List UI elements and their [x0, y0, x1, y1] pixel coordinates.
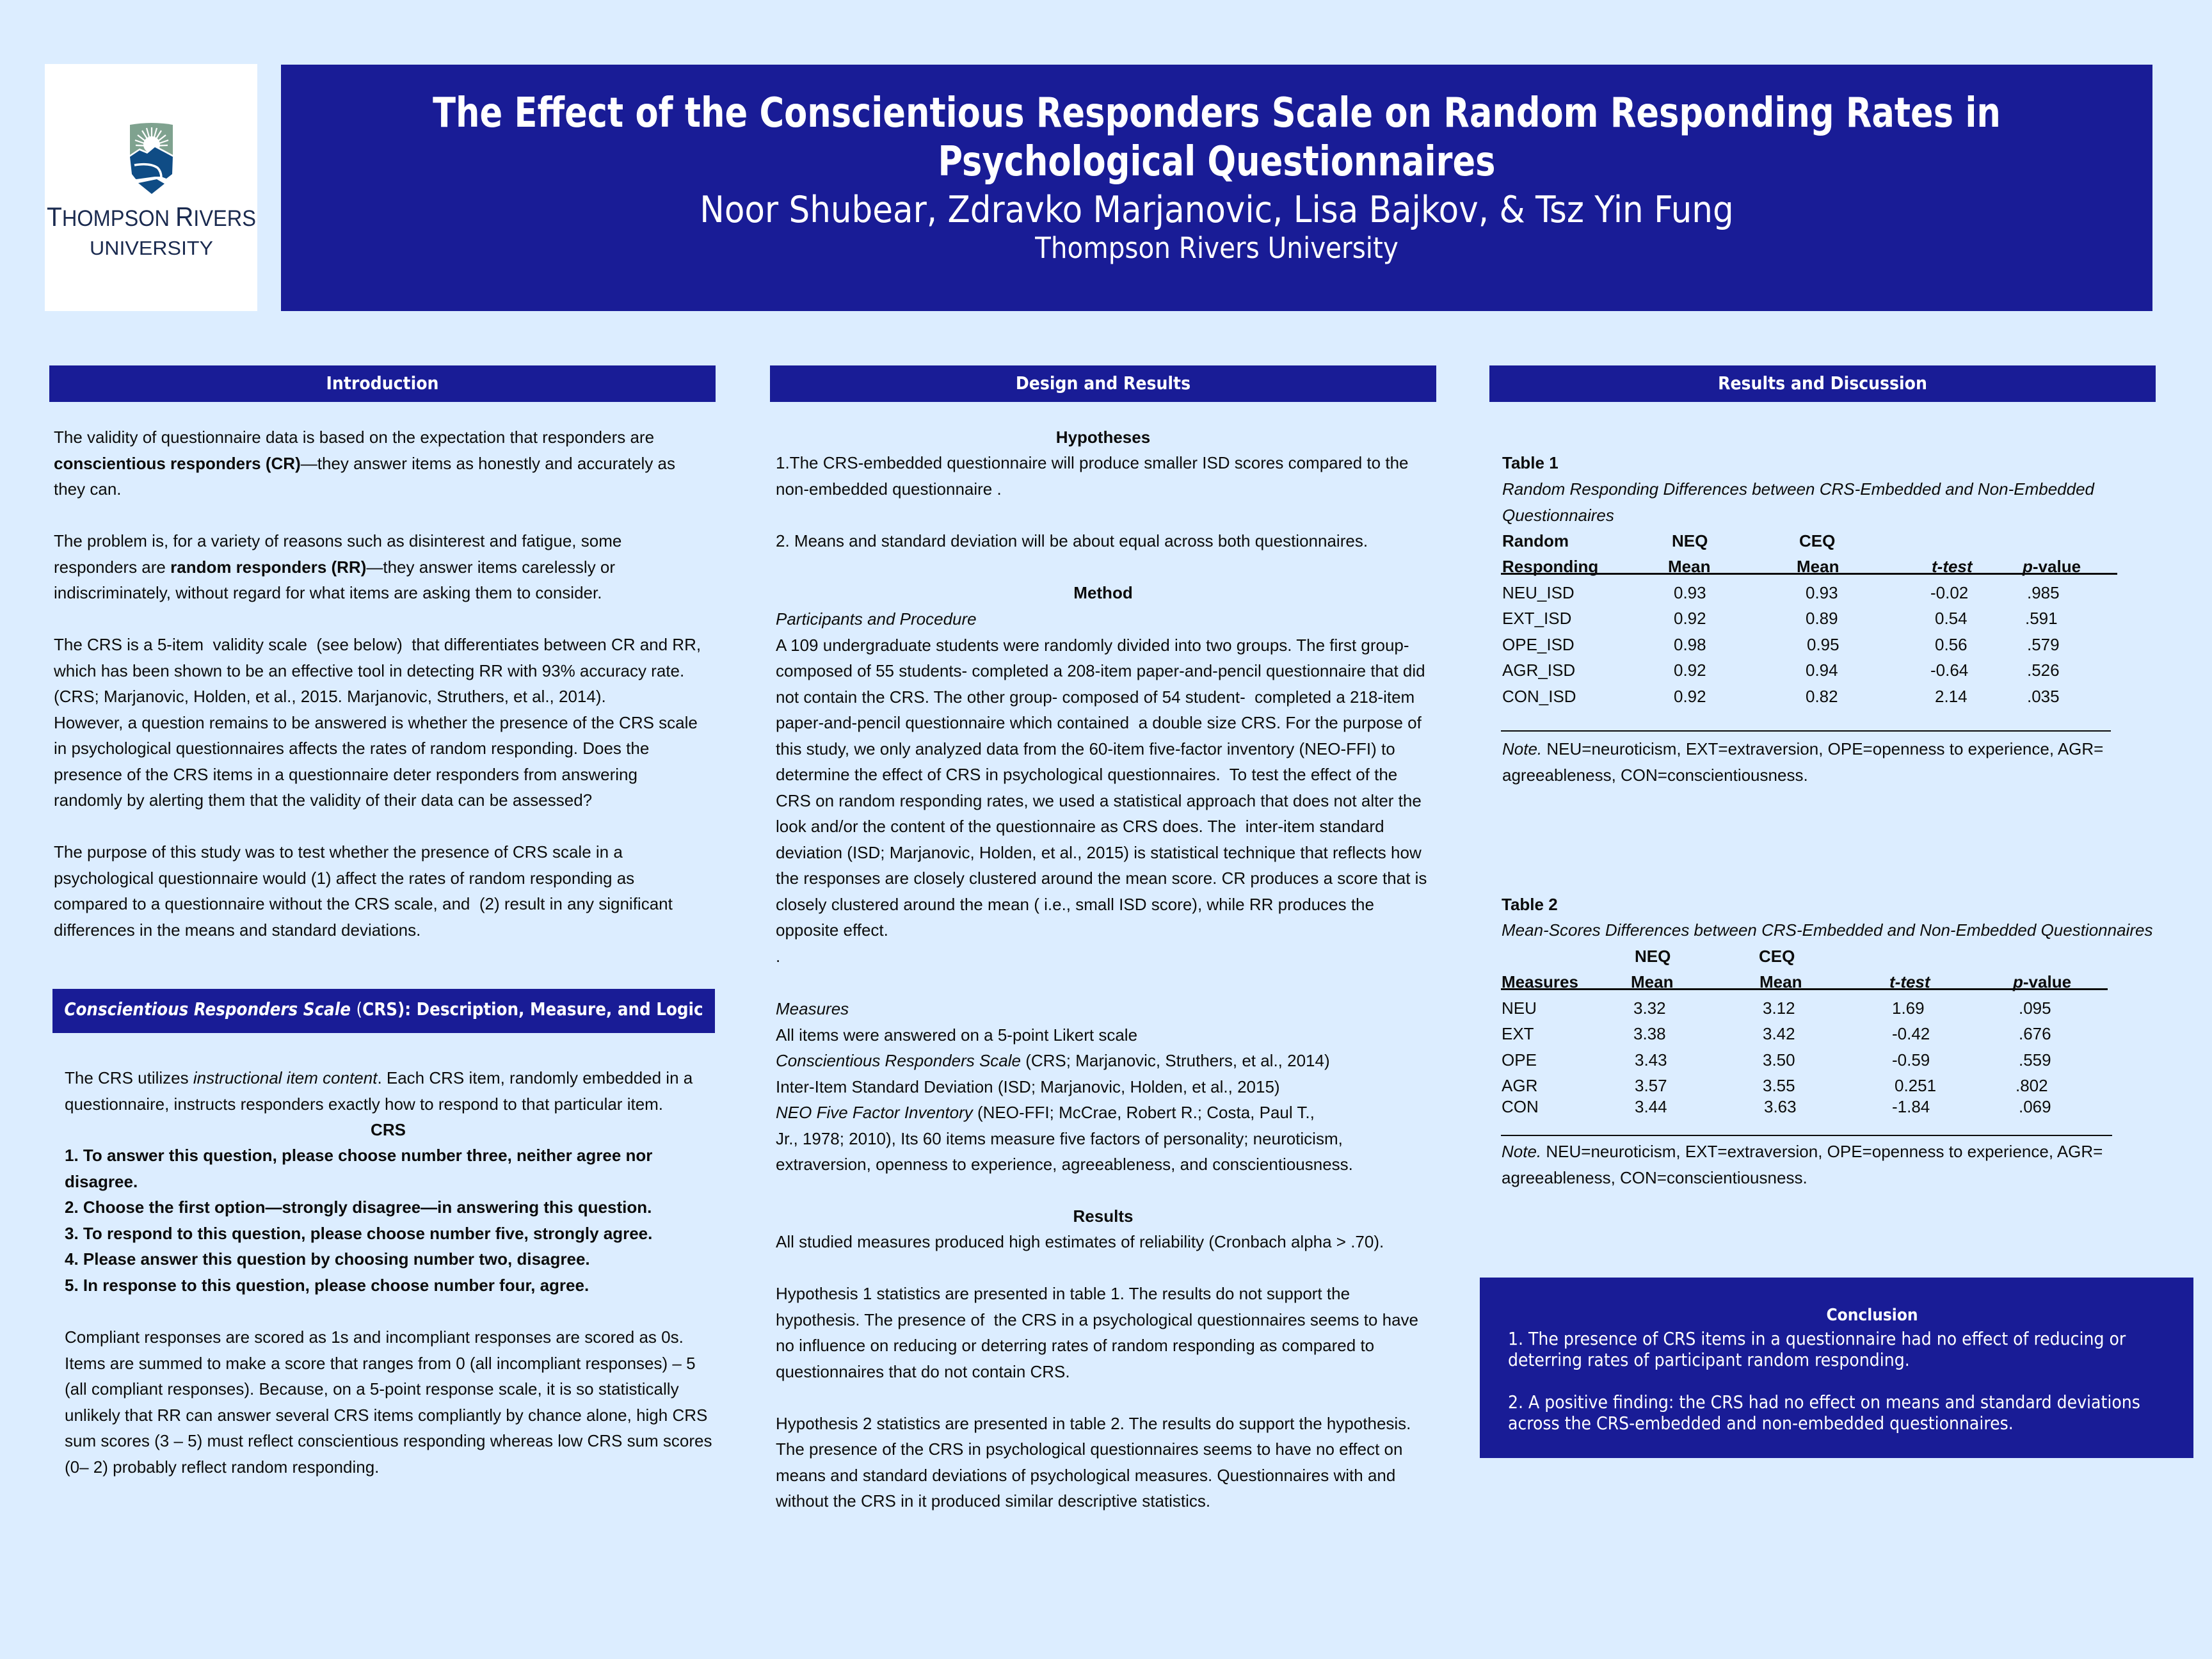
list: CRS items: 4. Please answer this question by choosing number two, disagree. [65, 1249, 590, 1269]
table 1 header: NEQ [1672, 531, 1708, 550]
table 1 header: Mean [1668, 557, 1710, 576]
text: participants and procedure: determine the effect of CRS in psychological questionnaires. To test the effect of the [776, 765, 1397, 784]
text: participants and procedure: not contain the CRS. The other group- composed of 54 student- completed a 218-item [776, 687, 1415, 707]
text: participants and procedure: paper-and-pencil questionnaire which contained a double size CRS. For the purpose of [776, 713, 1422, 732]
table 2 data rows: 3.63 [1764, 1097, 1797, 1116]
text: the CRS scale: However, a question remains to be answered is whether the presence of the CRS scale [54, 713, 698, 732]
list: CRS items: disagree. [65, 1171, 138, 1190]
table 1 note: Note. NEU=neuroticism, EXT=extraversion, OPE=openness to experience, AGR= [1502, 739, 2103, 758]
panel: conclusion [1480, 1278, 2193, 1458]
text: participants and procedure [776, 609, 1427, 965]
text: hypotheses [776, 453, 1408, 550]
table 1 data rows: .985 [2027, 583, 2060, 602]
text: results: questionnaires that do not contain CRS. [776, 1362, 1070, 1381]
table 1 data rows: .579 [2027, 635, 2060, 654]
text: results: without the CRS in it produced similar descriptive statistics. [776, 1491, 1210, 1511]
table 1 data rows: EXT_ISD [1502, 609, 1571, 628]
table 2 data rows: -0.59 [1892, 1050, 1930, 1070]
subheading: Method: Method [1073, 583, 1133, 602]
text: validity of questionnaire data: they can. [54, 479, 122, 499]
text: purpose of the study [54, 842, 673, 940]
conclusion text [1508, 1328, 2140, 1434]
logo wordmark: THOMPSON RIVERS [47, 202, 256, 232]
heading: CRS description, measure, and logic [52, 989, 715, 1033]
table 2 data rows: 3.32 [1633, 998, 1666, 1018]
table 2 header: t-test [1889, 972, 1930, 991]
text: measures: NEO Five Factor Inventory (NEO-FFI; McCrae, Robert R.; Costa, Paul T., [776, 1103, 1315, 1122]
text: the CRS scale: (CRS; Marjanovic, Holden, et al., 2015. Marjanovic, Struthers, et al., 2014). [54, 687, 606, 706]
table 1 caption: Questionnaires [1502, 506, 1614, 525]
table 2 header: Measures [1502, 972, 1578, 991]
text: results: Hypothesis 2 statistics are presented in table 2. The results do support the hypothesis. [776, 1413, 1411, 1432]
table 1 header: Mean [1797, 557, 1839, 576]
text: the CRS scale: presence of the CRS items in a questionnaire deter responders from answering [54, 764, 637, 783]
conclusion text: 1. The presence of CRS items in a questionnaire had no effect of reducing or [1508, 1328, 2126, 1349]
table 1 data rows: 0.98 [1674, 635, 1706, 654]
poster title: Psychological Questionnaires [938, 138, 1495, 186]
heading: Results and Discussion: Results and Discussion [1718, 373, 1927, 394]
table 1 data rows: OPE_ISD [1502, 635, 1575, 654]
table 1 data rows: 0.93 [1674, 583, 1706, 602]
table 2 header: Mean [1631, 972, 1673, 991]
text: hypotheses: non-embedded questionnaire . [776, 479, 1002, 498]
table 1 data rows: 0.82 [1806, 687, 1838, 706]
table 2 data rows: 1.69 [1892, 998, 1925, 1018]
text: measures: Measures [776, 999, 849, 1018]
table 1 data rows: 0.56 [1935, 635, 1968, 654]
list: CRS items: 1. To answer this question, please choose number three, neither agree nor [65, 1146, 652, 1165]
table 2 data rows: .069 [2019, 1097, 2051, 1116]
poster title: The Effect of the Conscientious Responders Scale on Random Responding Rates in [433, 90, 2001, 137]
table 2 data rows: 3.55 [1763, 1076, 1795, 1095]
table 1 data rows: NEU_ISD [1502, 583, 1575, 602]
text: the CRS scale: which has been shown to be an effective tool in detecting RR with 93% accuracy rate. [54, 661, 684, 680]
panel: Conscientious Responders Scale description [52, 989, 715, 1476]
text: participants and procedure: CRS on random responding rates, we used a statistical approach that does not alter the [776, 791, 1422, 810]
table 1 data rows: -0.64 [1930, 661, 1968, 680]
table 2 data rows: 3.38 [1633, 1024, 1666, 1043]
table 2 header: CEQ [1759, 947, 1795, 966]
text: scoring: Compliant responses are scored as 1s and incompliant responses are scored as 0s. [65, 1327, 684, 1347]
table 2 data rows: -0.42 [1892, 1024, 1930, 1043]
text: the CRS scale: randomly by alerting them that the validity of their data can be assessed? [54, 790, 592, 810]
table 2 header: Mean [1759, 972, 1802, 991]
list: CRS items: 5. In response to this question, please choose number four, agree. [65, 1275, 589, 1294]
table 1 data rows: 0.54 [1935, 609, 1968, 628]
table 2 data rows: .676 [2019, 1024, 2051, 1043]
table 2 data rows: .095 [2019, 998, 2051, 1018]
text: results: no influence on reducing or deterring rates of random responding as compared to [776, 1336, 1374, 1355]
table 1 data rows: .526 [2027, 661, 2060, 680]
text: measures: Conscientious Responders Scale (CRS; Marjanovic, Struthers, et al., 2014) [776, 1051, 1330, 1070]
text: results: All studied measures produced high estimates of reliability (Cronbach alpha > .70). [776, 1232, 1384, 1251]
text: random responders problem [54, 531, 621, 602]
table 2 data rows: -1.84 [1892, 1097, 1930, 1116]
table 1 caption: Random Responding Differences between CRS-Embedded and Non-Embedded [1502, 479, 2094, 499]
table 1 data rows: .591 [2025, 609, 2058, 628]
logo wordmark [47, 202, 256, 259]
table 1 data rows: 0.92 [1674, 661, 1706, 680]
text: scoring [65, 1327, 712, 1476]
text: results: hypothesis. The presence of the CRS in a psychological questionnaires seems to have [776, 1310, 1418, 1329]
table 2 header [1501, 947, 2108, 991]
text: hypotheses: 2. Means and standard deviation will be about equal across both questionnaires. [776, 531, 1368, 550]
conclusion text: 2. A positive finding: the CRS had no effect on means and standard deviations [1508, 1391, 2140, 1413]
text: participants and procedure: deviation (ISD; Marjanovic, Holden, et al., 2015) is statistical technique that reflects how [776, 842, 1422, 862]
text: results [776, 1232, 1418, 1511]
text: results: The presence of the CRS in psychological questionnaires seems to have no effect on [776, 1439, 1402, 1459]
list: CRS items: 3. To respond to this question, please choose number five, strongly agree. [65, 1224, 652, 1243]
table 1 data rows: 0.95 [1807, 635, 1839, 654]
table 2 data rows: 3.42 [1763, 1024, 1795, 1043]
table 2 data rows: 3.44 [1635, 1097, 1667, 1116]
text: participants and procedure: the responses are closely clustered around the mean score. CR produces a score that is [776, 869, 1427, 888]
table 1 data rows: AGR_ISD [1502, 661, 1575, 680]
heading: CRS items: CRS [371, 1120, 406, 1139]
conclusion text: across the CRS-embedded and non-embedded questionnaires. [1508, 1413, 2014, 1434]
text: hypotheses: 1.The CRS-embedded questionnaire will produce smaller ISD scores compared to the [776, 453, 1408, 472]
text: participants and procedure: A 109 undergraduate students were randomly divided into two groups. The first group- [776, 635, 1409, 654]
text: random responders problem: The problem is, for a variety of reasons such as disinterest and fatigue, some [54, 531, 621, 550]
heading: Introduction [49, 365, 716, 402]
text: instructional item content: The CRS utilizes instructional item content. Each CRS item, randomly embedded in a [65, 1068, 693, 1087]
table 1 data rows: -0.02 [1930, 583, 1968, 602]
table 1 header: Responding [1502, 557, 1598, 576]
text: random responders problem: responders are random responders (RR)—they answer items carelessly or [54, 557, 615, 576]
table 2 data rows: NEU [1502, 998, 1537, 1018]
table 1 title: Table 1 [1502, 453, 1559, 472]
text: instructional item content [65, 1068, 693, 1114]
table 2 data rows: 3.12 [1763, 998, 1795, 1018]
heading: CRS description, measure, and logic: Conscientious Responders Scale (CRS): Description, Measure, and Logic [64, 1000, 703, 1020]
text: participants and procedure: . [776, 946, 780, 965]
table 2: mean-scores differences [1501, 895, 2152, 1187]
table 2 data rows: 3.57 [1635, 1076, 1667, 1095]
subheading: Hypotheses: Hypotheses [1056, 428, 1150, 447]
table 2 data rows: 3.43 [1635, 1050, 1667, 1070]
heading: Design and Results [770, 365, 1436, 402]
conclusion text: deterring rates of participant random responding. [1508, 1349, 1910, 1370]
table 1 header [1501, 531, 2117, 576]
text: participants and procedure: look and/or the content of the questionnaire as CRS does. The inter-item standard [776, 817, 1384, 836]
title banner [281, 65, 2152, 311]
logo shield icon [130, 123, 173, 194]
table 2 header: p-value [2013, 972, 2071, 991]
table 1 data rows [1502, 583, 2060, 706]
table 2 data rows: CON [1502, 1097, 1539, 1116]
table 1 note [1502, 739, 2103, 785]
text: purpose of the study: psychological questionnaire would (1) affect the rates of random responding as [54, 868, 634, 887]
table 2 caption: Mean-Scores Differences between CRS-Embedded and Non-Embedded Questionnaires [1502, 920, 2152, 940]
text: validity of questionnaire data: The validity of questionnaire data is based on the expectation that responders are [54, 428, 654, 447]
table 2 note [1502, 1142, 2103, 1187]
heading: Design and Results: Design and Results [1016, 373, 1190, 394]
text: measures [776, 999, 1353, 1174]
subheading: Results: Results [1073, 1206, 1133, 1226]
table 1 data rows: CON_ISD [1502, 687, 1576, 706]
table 2 data rows: .559 [2019, 1050, 2051, 1070]
table 2 data rows: EXT [1502, 1024, 1534, 1043]
text: purpose of the study: compared to a questionnaire without the CRS scale, and (2) result in any significant [54, 894, 673, 913]
text: measures: All items were answered on a 5-point Likert scale [776, 1025, 1137, 1045]
table 1 caption [1502, 479, 2095, 525]
text: scoring: unlikely that RR can answer several CRS items compliantly by chance alone, high CRS [65, 1406, 707, 1425]
text: the CRS scale: The CRS is a 5-item validity scale (see below) that differentiates between CR and RR, [54, 635, 701, 654]
table 1 data rows: 0.94 [1806, 661, 1838, 680]
table 2 data rows: 0.251 [1895, 1076, 1936, 1095]
text: validity of questionnaire data [54, 428, 675, 499]
table 2 note: Note. NEU=neuroticism, EXT=extraversion, OPE=openness to experience, AGR= [1502, 1142, 2103, 1161]
poster title [433, 90, 2001, 186]
panel: introduction [49, 365, 716, 940]
text: scoring: (0– 2) probably reflect random responding. [65, 1457, 379, 1476]
text: scoring: Items are summed to make a score that ranges from 0 (all incompliant responses) – 5 [65, 1353, 696, 1372]
table 2 data rows: AGR [1502, 1076, 1537, 1095]
table 2 note: agreeableness, CON=conscientiousness. [1502, 1167, 1807, 1187]
panel: design and results [770, 365, 1436, 1511]
text: participants and procedure: this study, we only analyzed data from the 60-item five-factor inventory (NEO-FFI) to [776, 739, 1395, 758]
table 1 note: agreeableness, CON=conscientiousness. [1502, 765, 1808, 785]
text: measures: extraversion, openness to experience, agreeableness, and conscientiousness. [776, 1155, 1353, 1174]
text: purpose of the study: The purpose of this study was to test whether the presence of CRS scale in a [54, 842, 623, 862]
text: participants and procedure: Participants and Procedure [776, 609, 977, 629]
table 1: random responding differences [1501, 453, 2117, 785]
text: participants and procedure: composed of 55 students- completed a 208-item paper-and-pencil questionnaire that did [776, 661, 1425, 680]
table 1 header: t-test [1932, 557, 1973, 576]
table 2 title: Table 2 [1502, 895, 1558, 914]
text: participants and procedure: closely clustered around the mean ( i.e., small ISD score), while RR produces the [776, 895, 1374, 914]
table 1 header: Random [1502, 531, 1569, 550]
text: participants and procedure: opposite effect. [776, 920, 888, 940]
table 1 header: p-value [2023, 557, 2081, 576]
table 2 data rows: OPE [1502, 1050, 1537, 1070]
table 2 data rows [1502, 998, 2051, 1116]
table 1 header: CEQ [1799, 531, 1835, 550]
table 1 data rows: 0.92 [1674, 687, 1706, 706]
table 2 data rows: .802 [2016, 1076, 2048, 1095]
text: the CRS scale: in psychological questionnaires affects the rates of random responding. Does the [54, 739, 649, 758]
table 2 header: NEQ [1635, 947, 1671, 966]
table 1 data rows: 0.92 [1674, 609, 1706, 628]
table 1 data rows: .035 [2027, 687, 2060, 706]
text: random responders problem: indiscriminately, without regard for what items are asking them to consider. [54, 583, 602, 602]
logo panel: Thompson Rivers University [45, 64, 257, 311]
affiliation: Thompson Rivers University [1035, 231, 1399, 265]
text: results: Hypothesis 1 statistics are presented in table 1. The results do not support the [776, 1284, 1350, 1303]
list: CRS items: 2. Choose the first option—strongly disagree—in answering this question. [65, 1198, 652, 1217]
text: purpose of the study: differences in the means and standard deviations. [54, 920, 421, 940]
table 1 data rows: 2.14 [1935, 687, 1968, 706]
logo wordmark: UNIVERSITY [90, 237, 213, 259]
text: scoring: sum scores (3 – 5) must reflect conscientious responding whereas low CRS sum scores [65, 1431, 712, 1450]
text: validity of questionnaire data: conscientious responders (CR)—they answer items as honestly and accurately as [54, 453, 675, 472]
heading: Results and Discussion [1489, 365, 2156, 402]
table 2 data rows: 3.50 [1763, 1050, 1795, 1070]
table 1 data rows: 0.93 [1806, 583, 1838, 602]
table 1 data rows: 0.89 [1806, 609, 1838, 628]
conclusion heading: Conclusion [1826, 1306, 1918, 1325]
text: measures: Inter-Item Standard Deviation (ISD; Marjanovic, Holden, et al., 2015) [776, 1077, 1280, 1096]
text: results: means and standard deviations of psychological measures. Questionnaires with and [776, 1466, 1395, 1485]
text: scoring: (all compliant responses). Because, on a 5-point response scale, it is so statistically [65, 1379, 679, 1399]
text: the CRS scale [54, 635, 701, 810]
text: measures: Jr., 1978; 2010), Its 60 items measure five factors of personality; neuroticism, [776, 1129, 1343, 1148]
heading: Introduction: Introduction [326, 373, 438, 394]
list: CRS items [65, 1146, 652, 1294]
text: instructional item content: questionnaire, instructs responders exactly how to respond to that particular item. [65, 1094, 663, 1114]
authors: Noor Shubear, Zdravko Marjanovic, Lisa Bajkov, & Tsz Yin Fung [700, 188, 1734, 231]
